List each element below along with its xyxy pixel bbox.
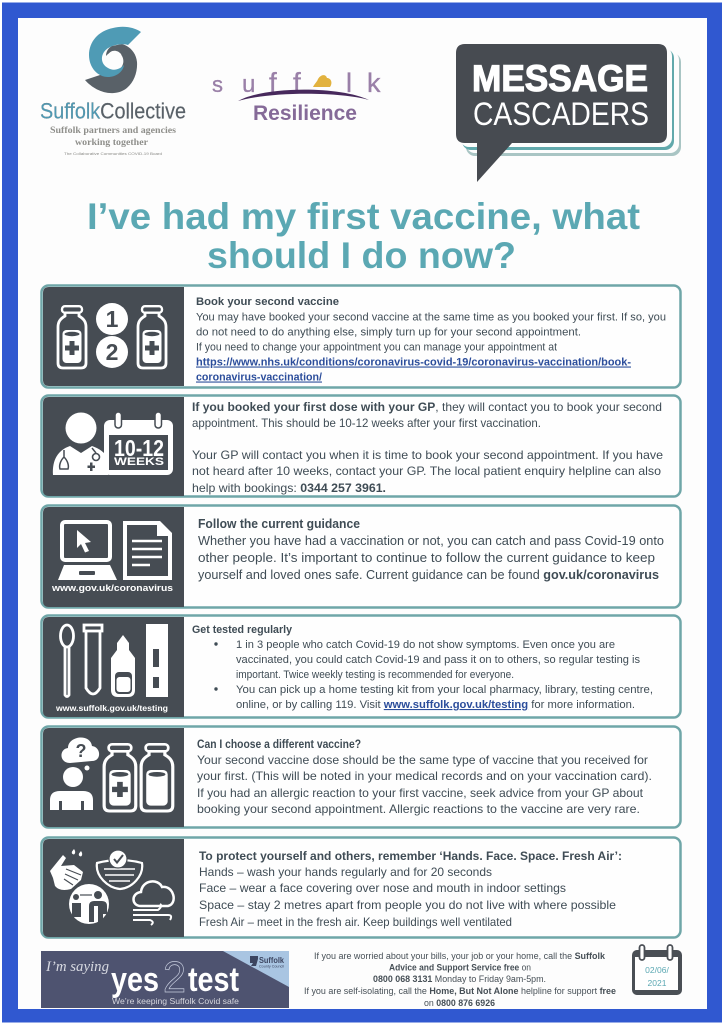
panel text (192, 624, 653, 711)
wordmark letters (212, 67, 381, 98)
logo strapline: The Collaborative Communities COVID-19 Board (64, 151, 162, 156)
footer support text: If you are worried about your bills, your job or your home, call the Suffolk (314, 951, 606, 961)
panel: follow the current guidance (42, 506, 680, 608)
wordmark letters: l (346, 68, 352, 98)
icon: hands, mask, distance, air (50, 849, 174, 925)
banner: yes 2 test: test (188, 961, 239, 999)
panel: book your second vaccine (42, 286, 680, 388)
icon: doctor and 10-12 weeks calendar (53, 412, 173, 475)
panel text (199, 849, 622, 929)
footer support text: 0800 068 3131 Monday to Friday 9am-5pm. (373, 974, 546, 984)
title: I’ve had my first vaccine, what (87, 195, 641, 237)
banner: yes 2 test: We’re keeping Suffolk Covid safe (112, 996, 239, 1006)
panel text: your first. (This will be noted in your medical records and on your vaccination card). (197, 769, 652, 783)
footer support text (304, 951, 616, 1008)
logo strapline: working together (75, 138, 149, 148)
panel text: do not need to do anything else, simply turn up for your second appointment. (196, 326, 581, 338)
banner: yes 2 test: I’m saying (45, 959, 109, 975)
panel text: Follow the current guidance (198, 517, 360, 531)
logo: Suffolk Resilience (212, 67, 381, 125)
panel text: online, or by calling 119. Visit www.suffolk.gov.uk/testing for more information. (236, 699, 635, 711)
footer support text: on 0800 876 6926 (424, 998, 495, 1008)
panel: get tested regularly (42, 616, 680, 718)
banner: yes 2 test: County Council (259, 964, 284, 968)
panel: choose a different vaccine (42, 726, 680, 828)
panel text: Space – stay 2 metres apart from people you do not live with where possible (199, 898, 616, 912)
wordmark letters: s (212, 72, 223, 97)
panel text (192, 400, 663, 495)
panel text (197, 737, 652, 816)
icon: testing kit: www.suffolk.gov.uk/testing (55, 703, 168, 713)
logo strapline (50, 126, 176, 156)
logo strapline: Suffolk partners and agencies (50, 126, 176, 136)
wordmark letters: k (367, 68, 381, 98)
panel text: other people. It’s important to continue to follow the current guidance to keep (198, 551, 655, 565)
wordmark letters: u (242, 71, 255, 98)
icon: person thinking and two vials: ? (76, 741, 86, 761)
panel text: https://www.nhs.uk/conditions/coronavirus-covid-19/coronavirus-vaccination/book- (196, 356, 631, 368)
banner: yes 2 test: yes (111, 961, 159, 999)
icon: vials with 1 and 2 (58, 303, 166, 368)
panel text: Can I choose a different vaccine? (197, 737, 361, 751)
panel text: You may have booked your second vaccine at the same time as you booked your first. If so, you (196, 312, 666, 324)
panel text: help with bookings: 0344 257 3961. (192, 481, 386, 495)
panel text: If you booked your first dose with your GP , they will contact you to book your second (192, 400, 662, 414)
panel: booked with your GP (42, 396, 680, 496)
logo: Message Cascaders speech bubble (456, 44, 681, 182)
banner: yes 2 test (41, 951, 289, 1008)
panel text: booking your second appointment. Allergic reactions to the vaccine are very rare. (197, 802, 640, 816)
logo: Message Cascaders speech bubble: CASCADERS (473, 96, 649, 132)
calendar date icon (632, 945, 682, 995)
panel text: Your GP will contact you when it is time to book your second appointment. If you have (192, 448, 663, 462)
panel text (196, 296, 666, 384)
banner: yes 2 test: Suffolk (259, 955, 284, 965)
banner: yes 2 test: 2 (163, 953, 186, 1002)
panel text: Book your second vaccine (196, 296, 339, 308)
footer support text: Advice and Support Service free on (389, 962, 531, 972)
logo: Suffolk Collective (40, 27, 186, 156)
logo: Message Cascaders speech bubble: MESSAGE (472, 58, 648, 99)
resilience text: Resilience (253, 102, 357, 125)
panel text: If you had an allergic reaction to your first vaccine, seek advice from your GP about (197, 786, 644, 800)
panel text: To protect yourself and others, remember ‘Hands. Face. Space. Fresh Air’: (199, 849, 622, 863)
panel text: Your second vaccine dose should be the same type of vaccine that you received for (197, 753, 648, 767)
panel text: vaccinated, you could catch Covid-19 and pass it on to others, so regular testing is (236, 654, 640, 666)
calendar date icon: 2021 (648, 978, 667, 988)
panel: hands face space fresh air (42, 838, 680, 938)
icon: testing kit (55, 624, 168, 713)
panel text: yourself and loved ones safe. Current guidance can be found gov.uk/coronavirus (198, 568, 659, 582)
panel text: Fresh Air – meet in the fresh air. Keep buildings well ventilated (199, 915, 512, 929)
panel text: If you need to change your appointment you can manage your appointment at (196, 342, 557, 354)
icon: doctor and 10-12 weeks calendar: WEEKS (114, 456, 164, 468)
footer support text: If you are self-isolating, call the Home, But Not Alone helpline for support free (304, 986, 616, 996)
icon: person thinking and two vials (50, 738, 173, 811)
icon: doctor and 10-12 weeks calendar: 10-12 (114, 435, 164, 461)
logo wordmark: SuffolkCollective (40, 98, 186, 124)
panel text: Hands – wash your hands regularly and for 20 seconds (199, 865, 492, 879)
icon: vials with 1 and 2: 1 (106, 306, 119, 332)
calendar date icon: 02/06/ (645, 965, 669, 975)
panel text: Face – wear a face covering over nose and mouth in indoor settings (199, 881, 566, 895)
icon: laptop and document: www.gov.uk/coronavirus (51, 583, 173, 594)
icon: swirl (85, 27, 141, 93)
wordmark letters: f (293, 67, 301, 98)
panel text: You can pick up a home testing kit from your local pharmacy, library, testing centre, (236, 684, 653, 696)
panel text: appointment. This should be 10-12 weeks after your first vaccination. (192, 416, 541, 430)
panel text (198, 517, 664, 582)
icon: laptop and document (51, 521, 173, 594)
panel text: 1 in 3 people who catch Covid-19 do not show symptoms. Even once you are (236, 639, 615, 651)
title (87, 195, 641, 276)
icon: vials with 1 and 2: 2 (106, 339, 118, 365)
icon: arc (238, 90, 369, 101)
title: should I do now? (207, 234, 516, 276)
icon: yellow heart (313, 75, 331, 87)
panel text: Get tested regularly (192, 624, 293, 636)
panel text: coronavirus-vaccination/ (196, 372, 322, 384)
panel text: not heard after 10 weeks, contact your GP. The local patient enquiry helpline can also (192, 464, 661, 478)
wordmark letters: f (269, 67, 277, 98)
panel text: Whether you have had a vaccination or not, you can catch and pass Covid-19 onto (198, 534, 664, 548)
panel text: important. Twice weekly testing is recommended for everyone. (236, 669, 514, 681)
